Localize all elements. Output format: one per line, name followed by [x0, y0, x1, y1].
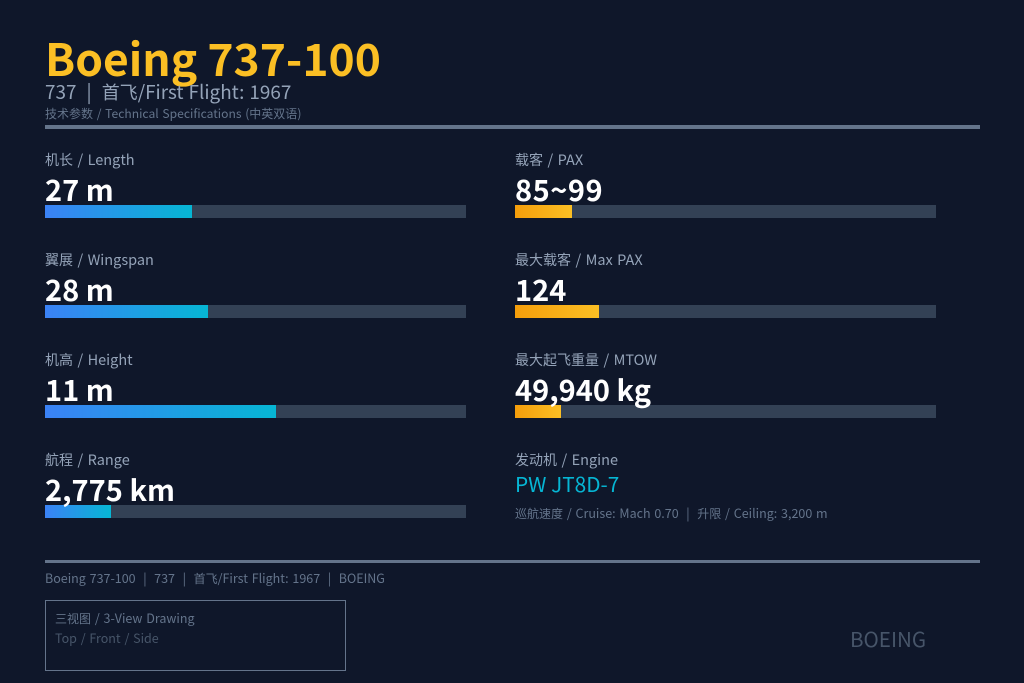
spec: height	[45, 349, 466, 418]
spec: engine	[515, 449, 828, 522]
spec: pax	[515, 149, 936, 218]
spec: length	[45, 149, 466, 218]
spec: length: 27 m	[45, 168, 114, 210]
spec: max pax	[515, 249, 936, 318]
spec: range	[45, 449, 466, 518]
spec: height: 11 m	[45, 368, 114, 410]
header divider	[45, 125, 980, 129]
spec: engine: 发动机 / Engine	[515, 449, 618, 470]
3-view drawing placeholder	[45, 600, 346, 671]
spec: mtow: 49,940 kg	[515, 368, 651, 410]
spec: max pax: 124	[515, 268, 566, 310]
subtitle: 737 | 首飞/First Flight: 1967	[45, 78, 291, 105]
3-view drawing placeholder: 三视图 / 3-View Drawing	[55, 608, 195, 627]
title: Boeing 737-100	[45, 24, 381, 89]
spec: range: 航程 / Range	[45, 449, 130, 470]
spec: pax: 85~99	[515, 168, 603, 210]
spec: wingspan	[45, 249, 466, 318]
spec: engine: PW JT8D-7	[515, 468, 619, 498]
footer divider	[45, 560, 980, 563]
spec: length: 机长 / Length	[45, 149, 135, 170]
spec: mtow	[515, 349, 936, 418]
footer text: Boeing 737-100 | 737 | 首飞/First Flight: 1967 | BOEING	[45, 568, 385, 587]
spec: max pax: 最大载客 / Max PAX	[515, 249, 643, 270]
section caption: 技术参数 / Technical Specifications (中英双语)	[45, 105, 301, 122]
spec: wingspan: 翼展 / Wingspan	[45, 249, 154, 270]
spec: wingspan: 28 m	[45, 268, 114, 310]
spec: pax: 载客 / PAX	[515, 149, 583, 170]
spec: height: 机高 / Height	[45, 349, 133, 370]
spec: mtow: 最大起飞重量 / MTOW	[515, 349, 657, 370]
spec: engine: 巡航速度 / Cruise: Mach 0.70 | 升限 / Ceiling: 3,200 m	[515, 503, 828, 522]
manufacturer mark: BOEING	[850, 623, 926, 653]
3-view drawing placeholder: Top / Front / Side	[55, 628, 159, 647]
spec: range: 2,775 km	[45, 468, 175, 510]
